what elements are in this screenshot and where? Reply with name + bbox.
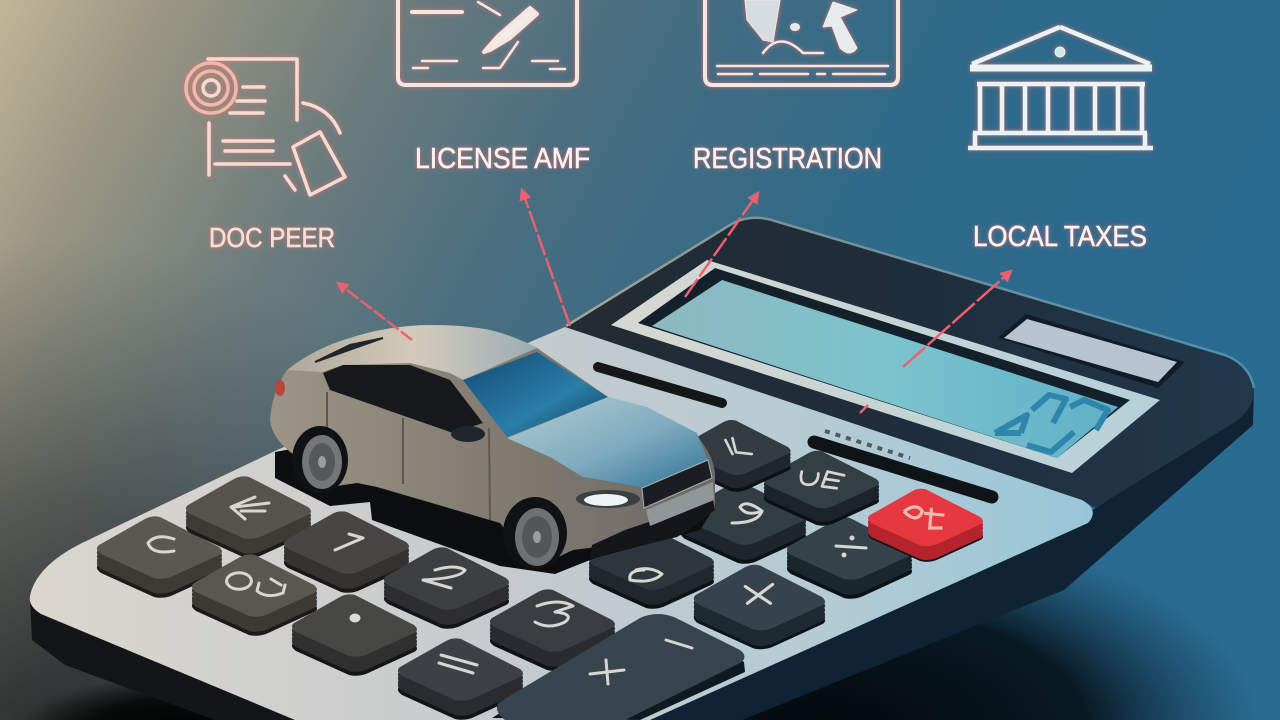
calculator (30, 218, 1254, 720)
icon: license card (398, 0, 577, 85)
icon: government building (968, 27, 1153, 148)
rear wheel (292, 426, 348, 494)
mirror (451, 426, 485, 442)
windshield (463, 352, 608, 437)
arrow: local taxes start tick (860, 405, 868, 413)
arrow: local taxes (903, 271, 1011, 367)
arrow: license (522, 190, 570, 326)
key red (868, 489, 983, 562)
key 00 (192, 554, 317, 636)
key plus minus wide (492, 614, 745, 720)
front wheel (503, 497, 567, 569)
hood (507, 397, 708, 487)
key UE (764, 451, 879, 526)
solar panel (1004, 319, 1177, 382)
icon: document with seal (186, 59, 345, 195)
key C (97, 516, 222, 598)
tail light (275, 380, 285, 396)
key equals (398, 638, 523, 720)
display frame (611, 260, 1160, 473)
calculator top panel (565, 218, 1254, 508)
bumper strip (646, 482, 714, 526)
label: local taxes: LOCAL TAXES (973, 221, 1147, 253)
lower bumper (590, 500, 715, 558)
key times (694, 565, 825, 649)
label: license: LICENSE AMF (415, 143, 590, 175)
side windows (323, 365, 483, 433)
key divide (787, 517, 912, 599)
roof vent (315, 338, 383, 362)
calculator key face (30, 327, 1093, 720)
label: doc fee: DOC PEER (209, 222, 335, 253)
slot above keys right (814, 442, 992, 497)
arrow: registration (685, 193, 758, 297)
key 1 (284, 511, 409, 593)
door seams (327, 392, 490, 520)
toy car (270, 325, 716, 574)
tiny printed marks (825, 431, 910, 458)
key 3 (490, 589, 615, 671)
grille (642, 460, 712, 508)
solar panel recess (998, 314, 1185, 388)
key dot (292, 594, 417, 676)
keys (97, 420, 983, 720)
panel rim highlight (566, 218, 1254, 388)
key 9 (681, 482, 806, 564)
display recess (638, 268, 1130, 458)
key arrow (186, 476, 311, 558)
arrow: doc fee (338, 283, 412, 340)
key 2 (384, 547, 509, 629)
key top row (680, 420, 791, 492)
display digits (995, 395, 1108, 452)
car roof (287, 325, 537, 380)
calculator front left edge (30, 600, 300, 720)
key 6 (589, 527, 714, 609)
display screen (652, 280, 1118, 458)
slot above keys left (598, 367, 722, 403)
icon: registration card (705, 0, 898, 85)
headlight (576, 490, 640, 508)
calculator right side (640, 385, 1254, 720)
car body (270, 325, 715, 567)
car shadow (275, 440, 716, 574)
label: registration: REGISTRATION (693, 143, 882, 175)
